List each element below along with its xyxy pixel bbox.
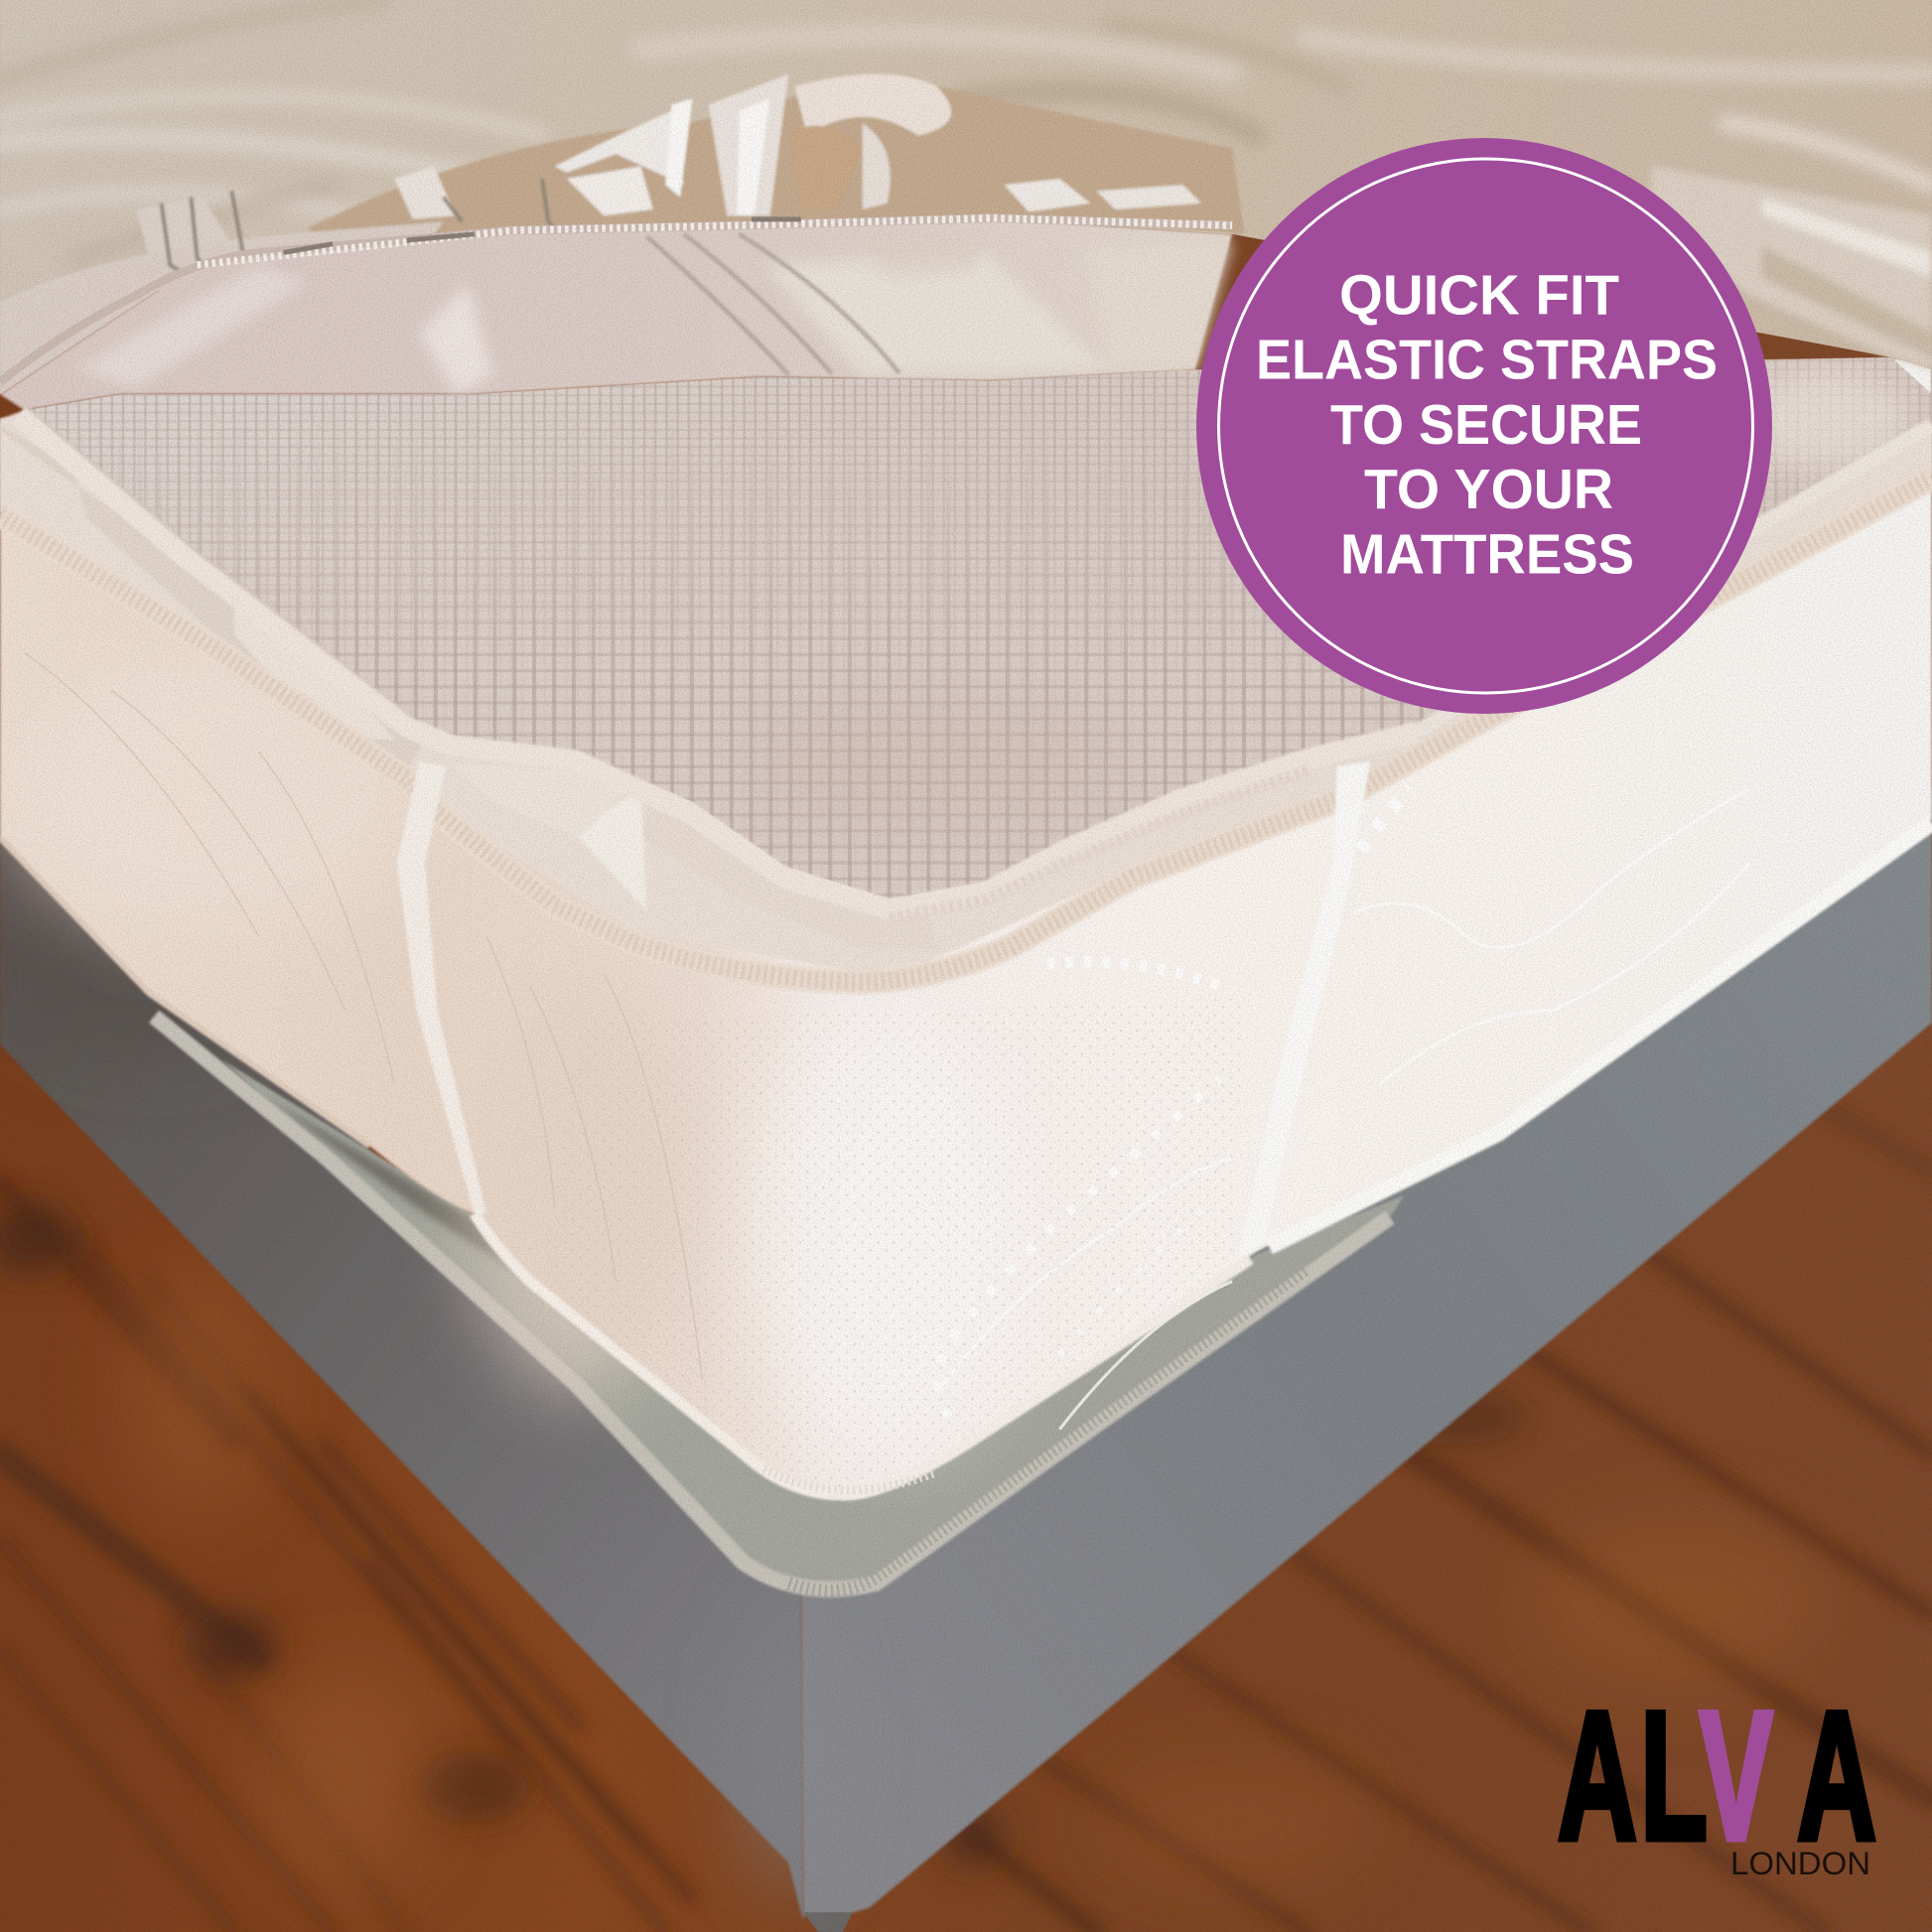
right-hand bedding folds <box>1651 167 1932 369</box>
badge text: TO SECURE <box>1330 393 1642 457</box>
bedding wrinkles <box>0 0 1932 259</box>
knit surface <box>30 357 1932 899</box>
divan piping <box>154 1017 1390 1589</box>
flap highlights and stripes <box>73 234 1232 394</box>
dotted ticking near corner <box>542 998 1244 1491</box>
badge text: QUICK FIT <box>1339 264 1619 328</box>
brand logo <box>1558 1675 1876 1881</box>
elastic protector flap <box>0 218 1232 410</box>
grey divan base: left face <box>0 813 803 1922</box>
divan foot <box>803 1912 853 1932</box>
badge inner ring <box>1219 159 1753 693</box>
bedding <box>0 0 1932 394</box>
knit binding <box>19 407 1932 918</box>
jacquard dashes <box>938 788 1411 1417</box>
mattress body <box>0 357 1932 1500</box>
mattress piping <box>0 479 1932 982</box>
badge text <box>1256 264 1718 587</box>
logo sub-line: LONDON <box>1730 1846 1870 1881</box>
left elastic strap <box>397 761 486 1213</box>
badge text: TO YOUR <box>1364 458 1613 521</box>
badge text: ELASTIC STRAPS <box>1256 329 1718 392</box>
mattress top border <box>0 410 1932 973</box>
gathered elastic hem <box>0 218 1232 382</box>
logo wordmark: ALVA <box>1558 1675 1876 1878</box>
shadow under mattress <box>265 1097 530 1282</box>
mattress border panels <box>0 425 936 949</box>
mattress front hem <box>1269 823 1932 1247</box>
grey divan base: right face <box>801 788 1932 1916</box>
gathered fabric <box>0 73 1244 394</box>
mattress quilting <box>25 653 702 1380</box>
bedding stripes <box>162 179 579 302</box>
sage divan top lip <box>221 1059 1405 1589</box>
badge disc <box>1196 138 1772 714</box>
right elastic strap <box>1238 761 1370 1257</box>
base shading <box>0 888 830 1897</box>
callout badge <box>1196 138 1772 714</box>
mattress shading <box>12 640 1368 1453</box>
badge text: MATTRESS <box>1340 523 1634 587</box>
